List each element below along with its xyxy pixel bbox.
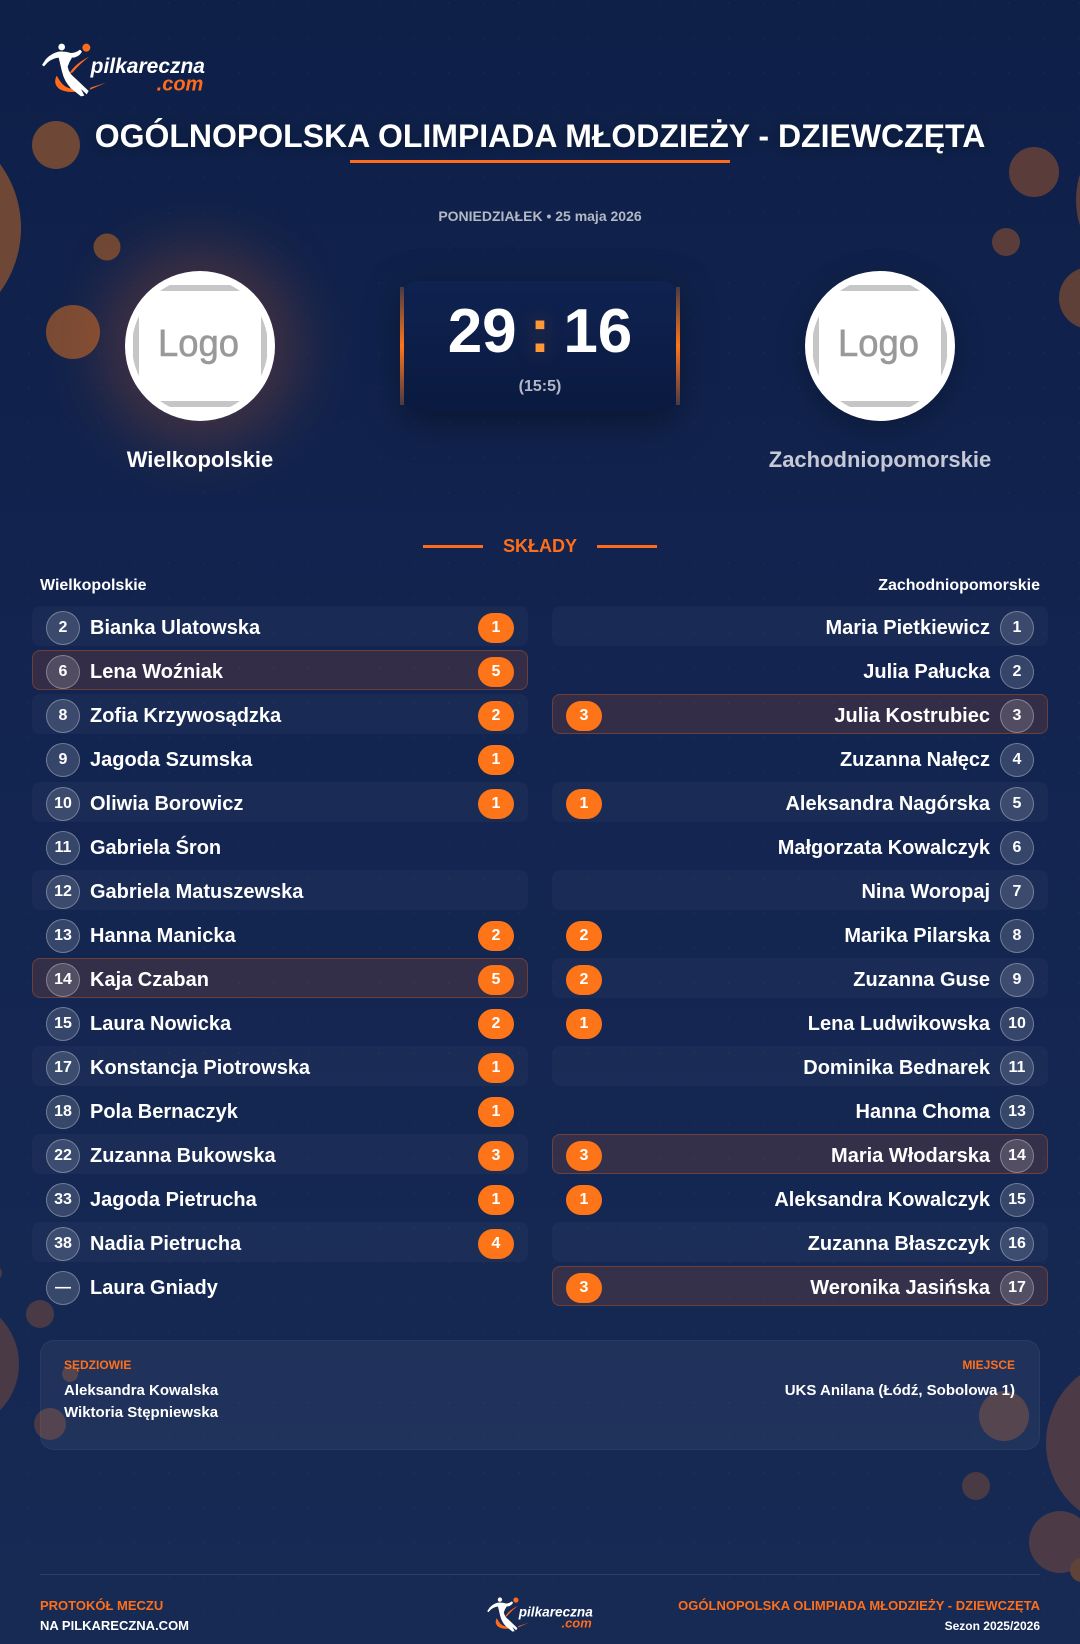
player row: 22 bbox=[54, 1147, 72, 1164]
player row highlighted bbox=[552, 1134, 1048, 1174]
player row: 11 bbox=[55, 839, 71, 856]
player row bbox=[32, 1046, 528, 1086]
player row highlighted: 14 bbox=[54, 970, 72, 988]
player row: 7 bbox=[1013, 883, 1021, 900]
player row bbox=[856, 1095, 1034, 1129]
player row: Gabriela Matuszewska bbox=[90, 881, 303, 903]
player row highlighted: 5 bbox=[492, 662, 500, 680]
footer left text: NA PILKARECZNA.COM bbox=[40, 1618, 189, 1633]
logo: pilkareczna.com bbox=[42, 44, 205, 96]
player row bbox=[32, 606, 528, 646]
title: OGÓLNOPOLSKA OLIMPIADA MŁODZIEŻY - DZIEWCZĘTA bbox=[95, 118, 985, 154]
player row: 5 bbox=[1013, 795, 1021, 812]
player row: 16 bbox=[1008, 1235, 1026, 1252]
player row highlighted: 3 bbox=[1013, 706, 1021, 724]
player row: Oliwia Borowicz bbox=[90, 793, 243, 815]
player row highlighted: 6 bbox=[59, 662, 67, 680]
player row bbox=[552, 606, 1048, 646]
player row bbox=[46, 919, 514, 953]
referees names: Wiktoria Stępniewska bbox=[64, 1404, 218, 1421]
home lineup bbox=[32, 611, 528, 1305]
title underline bbox=[350, 160, 730, 163]
footer logo bbox=[487, 1597, 593, 1632]
player row bbox=[566, 1007, 1034, 1041]
player row: 1 bbox=[492, 1103, 500, 1120]
score panel bbox=[392, 279, 688, 434]
player row: 1 bbox=[492, 795, 500, 812]
player row: 4 bbox=[1013, 751, 1021, 768]
player row: Nina Woropaj bbox=[861, 881, 990, 903]
player row bbox=[32, 782, 528, 822]
player row: Gabriela Śron bbox=[90, 837, 221, 859]
player row: Bianka Ulatowska bbox=[90, 617, 260, 639]
panel: match officials and venue bbox=[40, 1340, 1040, 1450]
away team name: Zachodniopomorskie bbox=[769, 447, 991, 472]
player row: 11 bbox=[1009, 1059, 1025, 1076]
player row highlighted: 3 bbox=[580, 1278, 588, 1296]
player row: Zuzanna Guse bbox=[853, 969, 990, 991]
player row: 10 bbox=[54, 795, 72, 812]
player row bbox=[46, 1183, 514, 1217]
player row bbox=[863, 655, 1034, 689]
player row: Hanna Manicka bbox=[90, 925, 236, 947]
player row highlighted: Maria Włodarska bbox=[831, 1144, 990, 1166]
player row bbox=[552, 1046, 1048, 1086]
player row: Konstancja Piotrowska bbox=[90, 1057, 310, 1079]
player row: Zofia Krzywosądzka bbox=[90, 705, 281, 727]
logo: pilkareczna.com: .com bbox=[157, 73, 203, 95]
player row: 17 bbox=[54, 1059, 72, 1076]
away team logo bbox=[805, 271, 955, 421]
player row: Laura Nowicka bbox=[90, 1013, 231, 1035]
player row: 8 bbox=[59, 707, 67, 724]
player row: Aleksandra Kowalczyk bbox=[774, 1189, 990, 1211]
player row bbox=[46, 1271, 218, 1305]
footer logo: pilkareczna bbox=[518, 1604, 593, 1619]
player row: 18 bbox=[54, 1103, 72, 1120]
player row bbox=[46, 1095, 514, 1129]
player row: 9 bbox=[1013, 971, 1021, 988]
match date: PONIEDZIAŁEK • 25 maja 2026 bbox=[438, 208, 642, 224]
player row bbox=[566, 1183, 1034, 1217]
player row: 2 bbox=[492, 1015, 500, 1032]
player row: 1 bbox=[492, 1059, 500, 1076]
player row highlighted bbox=[552, 1266, 1048, 1306]
player row: 13 bbox=[1008, 1103, 1026, 1120]
player row: Małgorzata Kowalczyk bbox=[778, 837, 990, 859]
player row: Aleksandra Nagórska bbox=[785, 793, 990, 815]
player row highlighted: 3 bbox=[580, 706, 588, 724]
player row: 15 bbox=[1008, 1191, 1026, 1208]
footer left text: PROTOKÓŁ MECZU bbox=[40, 1598, 163, 1613]
player row: 2 bbox=[59, 619, 67, 636]
player row bbox=[840, 743, 1034, 777]
player row: Dominika Bednarek bbox=[803, 1057, 990, 1079]
player row highlighted bbox=[32, 650, 528, 690]
footer right text: OGÓLNOPOLSKA OLIMPIADA MŁODZIEŻY - DZIEWCZĘTA bbox=[678, 1598, 1040, 1613]
player row: 4 bbox=[492, 1235, 500, 1252]
player row bbox=[552, 958, 1048, 998]
player row highlighted: Weronika Jasińska bbox=[810, 1276, 990, 1298]
logo: pilkareczna.com: pilkareczna bbox=[90, 55, 205, 78]
player row: Julia Pałucka bbox=[863, 661, 990, 683]
player row bbox=[46, 831, 221, 865]
player row: 6 bbox=[1013, 839, 1021, 856]
player row: 1 bbox=[580, 1015, 588, 1032]
away team label: Zachodniopomorskie bbox=[878, 577, 1040, 594]
player row: 13 bbox=[54, 927, 72, 944]
player row: Zuzanna Błaszczyk bbox=[808, 1233, 990, 1255]
player row: Pola Bernaczyk bbox=[90, 1101, 238, 1123]
player row bbox=[46, 743, 514, 777]
player row highlighted: 5 bbox=[492, 970, 500, 988]
player row bbox=[32, 870, 528, 910]
player row: 9 bbox=[59, 751, 67, 768]
player row: Lena Ludwikowska bbox=[808, 1013, 990, 1035]
player row: 1 bbox=[580, 795, 588, 812]
player row: 12 bbox=[54, 883, 72, 900]
home team logo bbox=[125, 271, 275, 421]
player row: 1 bbox=[492, 619, 500, 636]
player row: 8 bbox=[1013, 927, 1021, 944]
player row: 1 bbox=[580, 1191, 588, 1208]
player row bbox=[552, 870, 1048, 910]
home team name: Wielkopolskie bbox=[127, 447, 273, 472]
player row: 1 bbox=[492, 1191, 500, 1208]
player row: 2 bbox=[580, 927, 588, 944]
home team logo: Logo bbox=[158, 323, 239, 365]
player row highlighted: 14 bbox=[1008, 1146, 1026, 1164]
footer right text bbox=[678, 1598, 1040, 1633]
player row bbox=[552, 782, 1048, 822]
player row highlighted: Lena Woźniak bbox=[90, 660, 223, 682]
player row: — bbox=[55, 1279, 71, 1296]
player row highlighted: 17 bbox=[1008, 1278, 1026, 1296]
player row highlighted: 3 bbox=[580, 1146, 588, 1164]
player row: 1 bbox=[492, 751, 500, 768]
player row: Hanna Choma bbox=[856, 1101, 990, 1123]
player row: 10 bbox=[1008, 1015, 1026, 1032]
away lineup bbox=[552, 611, 1048, 1306]
footer divider bbox=[40, 1574, 1040, 1575]
footer right text: Sezon 2025/2026 bbox=[945, 1619, 1040, 1633]
player row bbox=[778, 831, 1034, 865]
home team label: Wielkopolskie bbox=[40, 577, 147, 594]
section heading: składy bbox=[423, 536, 657, 556]
player row: 2 bbox=[492, 707, 500, 724]
player row: Zuzanna Bukowska bbox=[90, 1145, 276, 1167]
score: 29:16 bbox=[448, 297, 632, 366]
player row: 38 bbox=[54, 1235, 72, 1252]
venue name: UKS Anilana (Łódź, Sobolowa 1) bbox=[785, 1382, 1015, 1399]
player row: Marika Pilarska bbox=[844, 925, 990, 947]
player row bbox=[32, 694, 528, 734]
player row: 3 bbox=[492, 1147, 500, 1164]
player row: 1 bbox=[1013, 619, 1021, 636]
referees names bbox=[64, 1382, 218, 1421]
footer left text bbox=[40, 1598, 189, 1633]
player row: 15 bbox=[54, 1015, 72, 1032]
player row: Zuzanna Nałęcz bbox=[840, 749, 990, 771]
player row bbox=[46, 1007, 514, 1041]
player row: 2 bbox=[580, 971, 588, 988]
referees names: Aleksandra Kowalska bbox=[64, 1382, 218, 1399]
venue heading: MIEJSCE bbox=[962, 1358, 1015, 1372]
player row: 33 bbox=[54, 1191, 72, 1208]
player row bbox=[552, 1222, 1048, 1262]
player row highlighted bbox=[552, 694, 1048, 734]
player row: Jagoda Pietrucha bbox=[90, 1189, 257, 1211]
away team logo: Logo bbox=[838, 323, 919, 365]
player row highlighted: Julia Kostrubiec bbox=[834, 704, 990, 726]
player row bbox=[32, 1222, 528, 1262]
player row highlighted bbox=[32, 958, 528, 998]
referees heading: SĘDZIOWIE bbox=[64, 1358, 131, 1372]
player row: Nadia Pietrucha bbox=[90, 1233, 241, 1255]
half-time score: (15:5) bbox=[519, 378, 561, 395]
player row: Jagoda Szumska bbox=[90, 749, 252, 771]
player row: Maria Pietkiewicz bbox=[825, 617, 990, 639]
footer logo: .com bbox=[561, 1616, 592, 1631]
player row: 2 bbox=[1013, 663, 1021, 680]
player row bbox=[566, 919, 1034, 953]
section heading: składy: SKŁADY bbox=[503, 536, 577, 556]
player row bbox=[32, 1134, 528, 1174]
player row: 2 bbox=[492, 927, 500, 944]
player row: Laura Gniady bbox=[90, 1277, 218, 1299]
player row highlighted: Kaja Czaban bbox=[90, 968, 209, 990]
